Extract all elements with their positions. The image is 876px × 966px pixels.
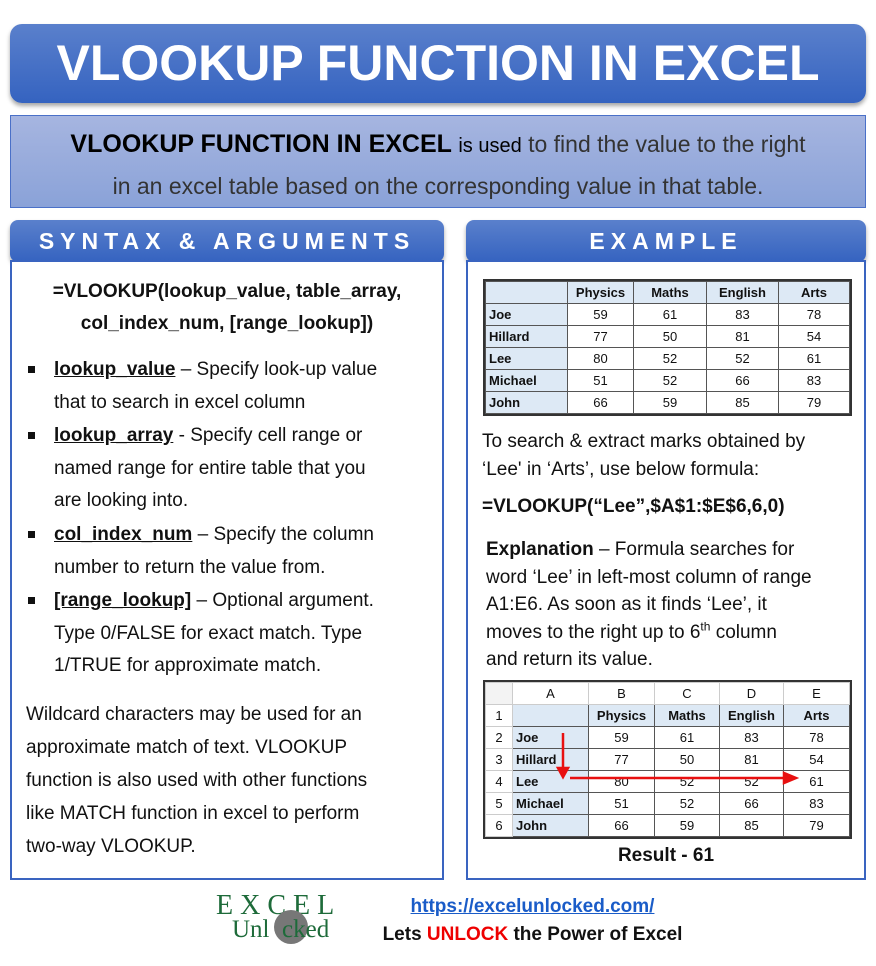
data table: 52	[663, 351, 677, 366]
explanation: and return its value.	[486, 649, 653, 670]
excel grid table: 5	[495, 796, 503, 811]
wildcard note	[26, 704, 367, 857]
data table	[483, 279, 852, 416]
excel grid table: 59	[680, 818, 694, 833]
logo	[216, 890, 341, 944]
wildcard note: Wildcard characters may be used for an	[26, 704, 362, 725]
argument: lookup_value: lookup_value – Specify look-up value	[54, 359, 377, 380]
example text: ‘Lee' in ‘Arts’, use below formula:	[482, 459, 759, 480]
excel grid table: E	[812, 686, 821, 701]
argument: range_lookup: [range_lookup] – Optional argument.	[54, 590, 374, 611]
data table: Arts	[801, 285, 827, 300]
excel grid table: 80	[614, 774, 629, 789]
excel grid table: 66	[744, 796, 759, 811]
excel grid table: Michael	[516, 796, 564, 811]
data table: English	[719, 285, 766, 300]
data table: Maths	[651, 285, 689, 300]
excel grid table: 2	[495, 730, 503, 745]
logo: EXCEL	[216, 890, 341, 921]
data table: 61	[663, 307, 677, 322]
excel grid table: 50	[680, 752, 694, 767]
data table: 79	[807, 395, 821, 410]
argument: lookup_value	[54, 354, 406, 419]
data table: 50	[663, 329, 677, 344]
data table: Lee	[489, 351, 511, 366]
excel grid table: Hillard	[516, 752, 556, 767]
excel grid table: 61	[680, 730, 694, 745]
example text: To search & extract marks obtained by	[482, 431, 805, 452]
excel grid table: Physics	[597, 708, 646, 723]
explanation	[486, 539, 812, 670]
argument: lookup_array	[54, 420, 406, 518]
data table: 66	[593, 395, 608, 410]
excel grid table: Joe	[516, 730, 538, 745]
excel grid table: D	[747, 686, 756, 701]
data table: 83	[735, 307, 750, 322]
example text	[482, 431, 805, 480]
excel grid table: 66	[614, 818, 629, 833]
data table: Michael	[489, 373, 537, 388]
header: example: EXAMPLE	[589, 228, 743, 254]
excel grid table: A	[546, 686, 555, 701]
header: syntax: SYNTAX & ARGUMENTS	[39, 228, 415, 254]
argument: col_index_num	[54, 519, 406, 584]
explanation: word ‘Lee’ in left-most column of range	[486, 566, 812, 588]
excel grid table: Maths	[668, 708, 706, 723]
logo: Unlocked	[232, 916, 329, 943]
tagline: Lets UNLOCK the Power of Excel	[383, 924, 682, 945]
data table: 51	[593, 373, 608, 388]
excel grid table: 1	[495, 708, 503, 723]
syntax formula: =VLOOKUP(lookup_value, table_array,	[53, 281, 401, 302]
excel grid table: 6	[495, 818, 503, 833]
excel grid table	[483, 680, 852, 839]
data table: 59	[593, 307, 608, 322]
result: Result - 61	[618, 845, 714, 866]
wildcard note: like MATCH function in excel to perform	[26, 803, 359, 824]
data table: Hillard	[489, 329, 529, 344]
excel grid table: 83	[809, 796, 824, 811]
data table: 61	[807, 351, 821, 366]
excel grid table: C	[682, 686, 692, 701]
argument: col_index_num: number to return the value from.	[54, 556, 325, 578]
excel grid table: 83	[744, 730, 759, 745]
description box	[10, 115, 866, 208]
excel grid table: 3	[495, 752, 503, 767]
data table: 81	[735, 329, 750, 344]
argument: range_lookup: 1/TRUE for approximate match.	[54, 655, 321, 676]
description box: VLOOKUP FUNCTION IN EXCEL is used to find the value to the right	[70, 130, 806, 158]
data table: Joe	[489, 307, 511, 322]
header: example	[466, 220, 866, 262]
excel grid table: B	[617, 686, 626, 701]
panel: syntax	[10, 260, 444, 880]
data table: 66	[735, 373, 750, 388]
wildcard note: function is also used with other functions	[26, 770, 367, 791]
argument: lookup_array: named range for entire table that you	[54, 458, 366, 478]
panel: example	[466, 260, 866, 880]
syntax formula	[53, 281, 401, 334]
wildcard note: two-way VLOOKUP.	[26, 836, 196, 857]
data table: 52	[735, 351, 750, 366]
excel grid table: 85	[744, 818, 759, 833]
excel grid table: 77	[614, 752, 629, 767]
argument: range_lookup	[54, 585, 406, 682]
data table: 78	[807, 307, 821, 322]
excel grid table: 54	[809, 752, 824, 767]
data table: Physics	[576, 285, 625, 300]
excel grid table: English	[728, 708, 775, 723]
explanation: A1:E6. As soon as it finds ‘Lee’, it	[486, 594, 767, 615]
excel grid table: 52	[744, 774, 759, 789]
explanation: moves to the right up to 6th column	[486, 619, 777, 642]
data table: 77	[593, 329, 608, 344]
argument: col_index_num: col_index_num – Specify the column	[54, 524, 374, 545]
excel grid table: Arts	[803, 708, 830, 723]
argument: range_lookup: Type 0/FALSE for exact match. Type	[54, 622, 362, 644]
excel grid table: 51	[614, 796, 629, 811]
excel grid table: 78	[809, 730, 824, 745]
excel grid table: Lee	[516, 774, 538, 789]
title: VLOOKUP FUNCTION IN EXCEL	[56, 35, 820, 91]
example formula: =VLOOKUP(“Lee”,$A$1:$E$6,6,0)	[482, 496, 785, 517]
excel grid table: 52	[680, 774, 694, 789]
header: syntax	[10, 220, 444, 262]
argument: lookup_array: are looking into.	[54, 490, 188, 511]
excel grid table: 81	[744, 752, 759, 767]
data table: 54	[807, 329, 821, 344]
wildcard note: approximate match of text. VLOOKUP	[26, 737, 347, 758]
data table: 52	[663, 373, 677, 388]
explanation: Explanation – Formula searches for	[486, 539, 794, 560]
data table: 80	[593, 351, 608, 366]
excel grid table: 4	[495, 774, 503, 789]
argument: lookup_value: that to search in excel column	[54, 392, 305, 412]
data table: 83	[807, 373, 821, 388]
excel grid table: 59	[614, 730, 629, 745]
data table: 59	[663, 395, 677, 410]
description box: in an excel table based on the corresponding value in that table.	[113, 173, 763, 199]
excel grid table: 61	[809, 774, 824, 789]
arrows	[556, 733, 800, 785]
excel grid table: 52	[680, 796, 694, 811]
data table: John	[489, 395, 520, 410]
title	[10, 24, 866, 103]
excel grid table: John	[516, 818, 547, 833]
url: https://excelunlocked.com/	[411, 896, 654, 917]
syntax formula: col_index_num, [range_lookup])	[81, 313, 373, 334]
argument: lookup_array: lookup_array - Specify cell range or	[54, 425, 362, 446]
data table: 85	[735, 395, 750, 410]
excel grid table: 79	[809, 818, 824, 833]
